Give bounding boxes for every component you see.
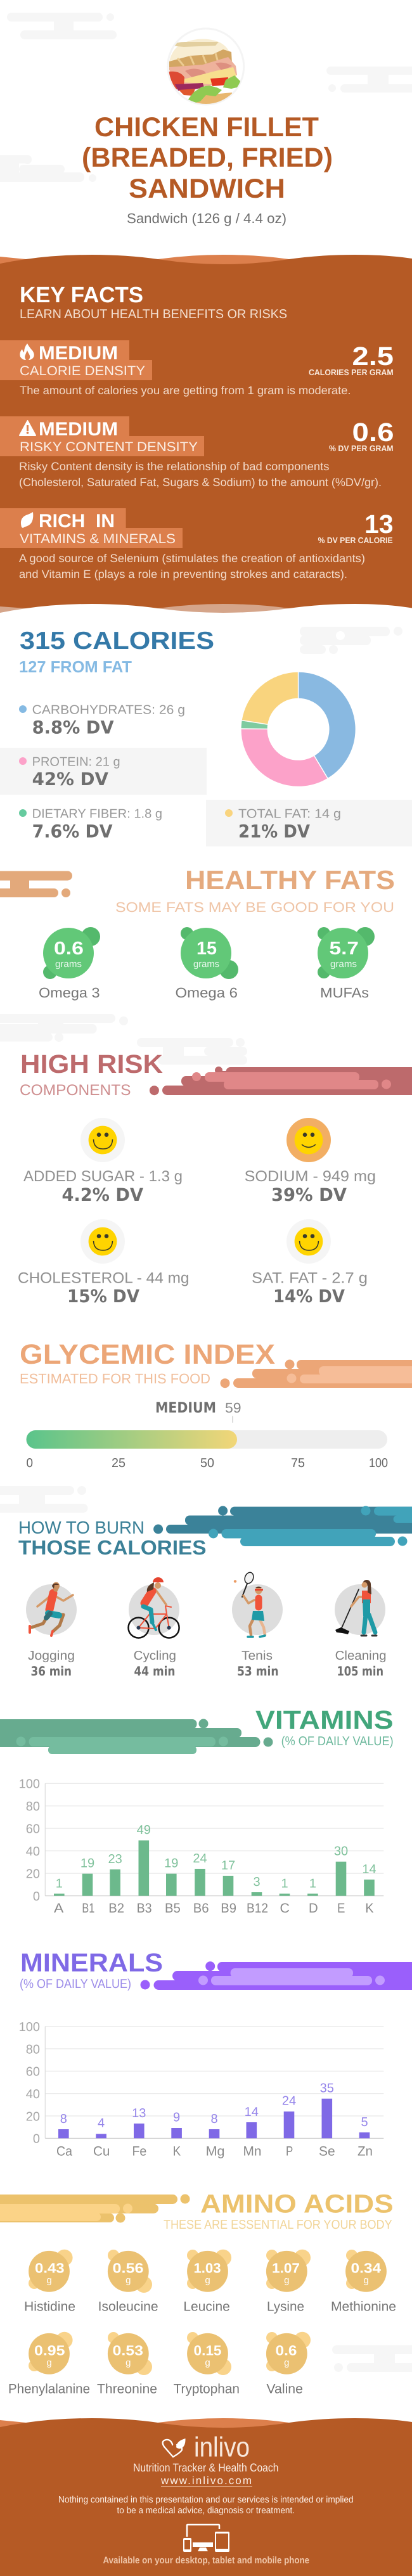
amino acid: tryptophan: g bbox=[205, 2357, 210, 2368]
activity: cycling: 44 min bbox=[134, 1663, 175, 1679]
amino acid: phenylalanine bbox=[8, 2332, 90, 2397]
logo: inlivo: inlivo bbox=[194, 2432, 250, 2463]
icon: cyclist bbox=[128, 1589, 179, 1638]
fact: calorie density: CALORIES PER GRAM bbox=[309, 368, 394, 377]
risk item: cholesterol: CHOLESTEROL - 44 mg bbox=[18, 1270, 189, 1286]
amino acid: methionine: Methionine bbox=[331, 2300, 396, 2314]
subtitle: serving size: Sandwich (126 g / 4.4 oz) bbox=[127, 210, 286, 226]
activity: tennis: 53 min bbox=[237, 1663, 279, 1679]
bar chart: vitamins: 14 bbox=[362, 1862, 377, 1876]
bar chart: vitamins: 20 bbox=[26, 1867, 40, 1881]
bar chart: vitamins: B6 bbox=[193, 1901, 209, 1916]
fact: rich in vitamins and minerals: RICH IN bbox=[39, 511, 115, 532]
amino acid: threonine: 0.53 bbox=[113, 2343, 143, 2359]
heading: key facts: KEY FACTS bbox=[20, 283, 143, 307]
amino acid: leucine: Leucine bbox=[183, 2300, 230, 2314]
glycemic index gauge bbox=[27, 1400, 388, 1470]
amino acid: lysine bbox=[266, 2250, 311, 2314]
amino acid: histidine: g bbox=[46, 2275, 52, 2286]
header photo: sandwich in circle bbox=[168, 29, 244, 109]
bar chart: vitamins: 3 bbox=[253, 1875, 261, 1889]
amino acid: histidine bbox=[24, 2250, 75, 2314]
fact: risky content density bbox=[0, 416, 394, 489]
amino acid: phenylalanine: 0.95 bbox=[34, 2343, 65, 2359]
bar chart: vitamins: 1 bbox=[281, 1876, 288, 1890]
fact: rich in vitamins and minerals: % DV PER CALORIE bbox=[318, 535, 393, 545]
legend: dietary fiber: 7.6% DV bbox=[32, 821, 113, 842]
bar chart: minerals: Se bbox=[319, 2144, 335, 2159]
bar chart: minerals: 14 bbox=[245, 2105, 259, 2119]
legend: protein: PROTEIN: 21 g bbox=[32, 755, 120, 769]
amino acid: histidine: Histidine bbox=[24, 2300, 75, 2314]
logo: inlivo bbox=[163, 2432, 250, 2463]
amino acid: methionine: g bbox=[363, 2275, 369, 2286]
subheading: ESTIMATED FOR THIS FOOD bbox=[20, 1371, 210, 1387]
bar chart: vitamins: D bbox=[309, 1901, 318, 1916]
fact: risky content density: (Cholesterol, Saturated Fat, Sugars & Sodium) to the amount (%DV/gr). bbox=[19, 476, 382, 489]
glycemic index gauge: 100 bbox=[369, 1456, 388, 1470]
heading: amino acids: AMINO ACIDS bbox=[200, 2189, 394, 2219]
legend: total fat: 21% DV bbox=[238, 821, 310, 842]
heading: how to burn those calories: THOSE CALORIES bbox=[18, 1536, 207, 1559]
fact: calorie density: 2.5 bbox=[352, 342, 394, 371]
title bbox=[82, 112, 333, 204]
heading: vitamins bbox=[255, 1705, 394, 1748]
badge: omega 3: Omega 3 bbox=[39, 985, 100, 1001]
bar chart: vitamins: 80 bbox=[26, 1800, 40, 1814]
heading: amino acids bbox=[164, 2189, 394, 2232]
fact: rich in vitamins and minerals: 13 bbox=[364, 509, 394, 539]
bar chart: minerals: 4 bbox=[98, 2117, 105, 2131]
donut chart: macronutrients bbox=[254, 685, 342, 773]
decorative bars: high risk bbox=[150, 1067, 412, 1095]
bar chart: minerals: 24 bbox=[282, 2094, 296, 2108]
title: (BREADED, FRIED) bbox=[82, 143, 333, 173]
activity: cycling bbox=[128, 1577, 179, 1679]
heading: healthy fats: HEALTHY FATS bbox=[185, 865, 395, 895]
bar chart: vitamins: B1 bbox=[82, 1901, 94, 1916]
panel: footer bbox=[0, 2418, 412, 2576]
amino acid: methionine bbox=[331, 2250, 396, 2314]
subheading: THESE ARE ESSENTIAL FOR YOUR BODY bbox=[164, 2218, 392, 2232]
activity: tennis bbox=[232, 1571, 283, 1679]
bar chart: minerals: 60 bbox=[26, 2065, 40, 2079]
subheading: calories from fat: 127 FROM FAT bbox=[19, 657, 132, 676]
icon: desktop, tablet and phone bbox=[183, 2525, 229, 2552]
badge: omega 6: grams bbox=[193, 959, 219, 970]
decorative bars: burn calories bbox=[153, 1506, 412, 1546]
bar chart: vitamins: B2 bbox=[108, 1901, 124, 1916]
activity: jogging: Jogging bbox=[28, 1649, 75, 1663]
decorative bars: vitamins bbox=[0, 1719, 273, 1754]
legend: dietary fiber bbox=[19, 807, 162, 842]
risk item: added sugar: 4.2% DV bbox=[62, 1184, 143, 1205]
fact: risky content density: % DV PER GRAM bbox=[329, 444, 394, 453]
amino acid: methionine: 0.34 bbox=[351, 2260, 382, 2276]
bar chart: minerals: 35 bbox=[320, 2081, 334, 2095]
icon: runner bbox=[30, 1593, 73, 1636]
bar chart: vitamins: 0 bbox=[33, 1890, 40, 1904]
risk item: sodium: 39% DV bbox=[271, 1184, 347, 1205]
title: SANDWICH bbox=[129, 174, 285, 204]
amino acid: tryptophan: 0.15 bbox=[194, 2343, 222, 2359]
bar chart: vitamins: E bbox=[337, 1901, 345, 1916]
activity: cycling: Cycling bbox=[134, 1649, 176, 1663]
badge: omega 3 bbox=[39, 927, 100, 1001]
panel: key facts bbox=[0, 255, 412, 618]
heading: calories bbox=[19, 627, 214, 676]
fact: risky content density: RISKY CONTENT DENSITY bbox=[20, 440, 198, 454]
bar chart: vitamins: 1 bbox=[309, 1876, 316, 1890]
heading: healthy fats bbox=[115, 865, 395, 915]
bar chart: minerals: P bbox=[286, 2144, 293, 2159]
bar chart: minerals: 0 bbox=[33, 2132, 40, 2146]
bar chart: minerals: K bbox=[173, 2144, 181, 2159]
legend: carbohydrates bbox=[19, 703, 185, 738]
bar chart: vitamins: 1 bbox=[56, 1876, 63, 1890]
amino acid: threonine bbox=[97, 2332, 157, 2397]
fact: risky content density: Risky Content density is the relationship of bad components bbox=[19, 460, 330, 473]
glycemic index gauge: MEDIUM bbox=[155, 1400, 216, 1416]
fact: risky content density: 0.6 bbox=[352, 418, 394, 447]
bar chart: minerals: 20 bbox=[26, 2110, 40, 2124]
risk item: saturated fat bbox=[252, 1219, 368, 1307]
subheading: (% OF DAILY VALUE) bbox=[281, 1734, 394, 1748]
bar chart: minerals: 100 bbox=[19, 2020, 40, 2034]
badge: omega 3: grams bbox=[55, 959, 82, 970]
risk item: cholesterol: 15% DV bbox=[67, 1286, 139, 1307]
heading: vitamins: VITAMINS bbox=[255, 1705, 394, 1734]
bar chart: vitamins: B3 bbox=[137, 1901, 152, 1916]
activity: tennis: Tenis bbox=[241, 1649, 273, 1663]
website link: www.inlivo.com bbox=[160, 2475, 252, 2487]
risk item: added sugar: ADDED SUGAR - 1.3 g bbox=[23, 1168, 183, 1185]
decorative bars: glycemic index bbox=[221, 1360, 412, 1388]
amino acid: leucine: 1.03 bbox=[194, 2260, 221, 2276]
bar chart: minerals: Mg bbox=[206, 2144, 224, 2159]
bar chart: minerals: 9 bbox=[173, 2111, 180, 2125]
bar chart: minerals: 8 bbox=[210, 2112, 218, 2126]
amino acid: isoleucine: 0.56 bbox=[113, 2260, 143, 2276]
bar chart: vitamins bbox=[19, 1777, 383, 1916]
amino acid: isoleucine: g bbox=[126, 2275, 131, 2286]
fact: rich in vitamins and minerals bbox=[0, 508, 394, 580]
activity: jogging: 36 min bbox=[30, 1663, 72, 1679]
bar chart: minerals: 8 bbox=[60, 2112, 67, 2126]
fact: calorie density bbox=[0, 340, 394, 397]
amino acid: isoleucine bbox=[98, 2250, 158, 2314]
subheading: SOME FATS MAY BE GOOD FOR YOU bbox=[115, 899, 394, 915]
badge: omega 6: 15 bbox=[196, 939, 217, 959]
subheading: COMPONENTS bbox=[20, 1082, 131, 1099]
bar chart: minerals: 40 bbox=[26, 2087, 40, 2101]
bar chart: minerals: Cu bbox=[93, 2144, 110, 2159]
risk item: sodium: SODIUM - 949 mg bbox=[245, 1168, 376, 1185]
amino acid: histidine: 0.43 bbox=[35, 2260, 65, 2276]
amino acid: leucine: g bbox=[205, 2275, 210, 2286]
legend: total fat bbox=[206, 800, 412, 847]
subheading: (% OF DAILY VALUE) bbox=[20, 1977, 131, 1991]
legend: total fat: TOTAL FAT: 14 g bbox=[238, 807, 341, 821]
bar chart: vitamins: 40 bbox=[26, 1845, 40, 1859]
activity: cleaning: Cleaning bbox=[335, 1649, 387, 1663]
decorative bars: minerals bbox=[141, 1961, 412, 1990]
heading: minerals bbox=[20, 1948, 163, 1991]
badge: MUFAs bbox=[318, 927, 375, 1001]
amino acid: isoleucine: Isoleucine bbox=[98, 2300, 158, 2314]
bar chart: vitamins: 19 bbox=[80, 1857, 94, 1871]
amino acid: leucine bbox=[183, 2250, 231, 2314]
amino acid: tryptophan bbox=[174, 2332, 240, 2397]
risk item: saturated fat: SAT. FAT - 2.7 g bbox=[252, 1270, 368, 1286]
fact: calorie density: MEDIUM bbox=[39, 343, 118, 364]
icon: tennis player bbox=[242, 1571, 265, 1637]
bar chart: vitamins: B5 bbox=[165, 1901, 181, 1916]
amino acid: valine: 0.6 bbox=[275, 2343, 297, 2359]
bar chart: vitamins: 24 bbox=[193, 1852, 207, 1866]
bar chart: minerals: Zn bbox=[357, 2144, 373, 2159]
amino acid: lysine: 1.07 bbox=[272, 2260, 300, 2276]
glycemic index gauge: 50 bbox=[200, 1456, 214, 1470]
badge: MUFAs: MUFAs bbox=[320, 985, 369, 1001]
decorative bars: healthy fats bbox=[0, 871, 72, 897]
bar chart: vitamins: K bbox=[365, 1901, 374, 1916]
activity: cleaning: 105 min bbox=[337, 1663, 383, 1679]
badge: omega 6: Omega 6 bbox=[175, 985, 238, 1001]
risk item: cholesterol bbox=[18, 1219, 189, 1307]
activity: jogging bbox=[26, 1582, 77, 1679]
badge: MUFAs: grams bbox=[330, 959, 357, 970]
glycemic index gauge: 0 bbox=[27, 1456, 33, 1470]
availability note: Available on your desktop, tablet and mobile phone bbox=[103, 2555, 309, 2566]
amino acid: valine: Valine bbox=[266, 2382, 303, 2397]
tagline: Nutrition Tracker & Health Coach bbox=[133, 2461, 279, 2474]
risk item: saturated fat: 14% DV bbox=[273, 1286, 345, 1307]
heading: calories: 315 CALORIES bbox=[20, 627, 214, 655]
legend: carbohydrates: 8.8% DV bbox=[32, 717, 114, 738]
fact: rich in vitamins and minerals: A good source of Selenium (stimulates the creation of antioxidants) bbox=[19, 552, 365, 565]
fact: calorie density: The amount of calories you are getting from 1 gram is moderate. bbox=[20, 384, 351, 397]
heading: glycemic index bbox=[20, 1339, 275, 1387]
legend: protein bbox=[0, 748, 207, 795]
bar chart: vitamins: C bbox=[280, 1901, 290, 1916]
heading: how to burn those calories bbox=[18, 1518, 207, 1559]
legend: carbohydrates: CARBOHYDRATES: 26 g bbox=[32, 703, 185, 717]
legend: dietary fiber: DIETARY FIBER: 1.8 g bbox=[32, 807, 162, 821]
glycemic index gauge: 59 bbox=[225, 1400, 241, 1416]
icon: person sweeping bbox=[342, 1589, 377, 1636]
fact: rich in vitamins and minerals: and Vitamin E (plays a role in preventing strokes and cataracts). bbox=[19, 568, 347, 580]
subheading: LEARN ABOUT HEALTH BENEFITS OR RISKS bbox=[20, 307, 287, 321]
disclaimer: to be a medical advice, diagnosis or treatment. bbox=[117, 2506, 295, 2516]
bar chart: minerals: Mn bbox=[243, 2144, 261, 2159]
risk item: sodium bbox=[245, 1118, 376, 1205]
bar chart: vitamins: 17 bbox=[221, 1859, 235, 1873]
heading: glycemic index: GLYCEMIC INDEX bbox=[20, 1339, 275, 1370]
icon: fire bbox=[20, 343, 34, 360]
fact: calorie density: CALORIE DENSITY bbox=[20, 364, 145, 378]
bar chart: vitamins: 30 bbox=[334, 1844, 348, 1858]
bar chart: minerals: 80 bbox=[26, 2042, 40, 2056]
risk item: added sugar bbox=[23, 1118, 183, 1205]
badge: omega 6 bbox=[175, 927, 238, 1001]
bar chart: minerals bbox=[19, 2020, 383, 2159]
bar chart: vitamins: 49 bbox=[137, 1823, 151, 1837]
bar chart: minerals: 13 bbox=[132, 2106, 146, 2120]
badge: MUFAs: 5.7 bbox=[330, 939, 359, 959]
disclaimer: Nothing contained in this presentation and our services is intended or implied bbox=[58, 2495, 354, 2505]
heading: how to burn those calories: HOW TO BURN bbox=[18, 1518, 145, 1537]
icon: leaf bbox=[21, 512, 33, 528]
amino acid: phenylalanine: Phenylalanine bbox=[8, 2382, 90, 2397]
bar chart: minerals: Ca bbox=[56, 2144, 72, 2159]
icon: warning triangle bbox=[20, 421, 35, 435]
glycemic index gauge: 25 bbox=[112, 1456, 126, 1470]
bar chart: vitamins: A bbox=[54, 1901, 63, 1916]
title: CHICKEN FILLET bbox=[94, 112, 319, 143]
amino acid: threonine: Threonine bbox=[97, 2382, 157, 2397]
activity: cleaning bbox=[335, 1580, 387, 1679]
bar chart: vitamins: 23 bbox=[108, 1852, 122, 1866]
amino acid: threonine: g bbox=[126, 2357, 131, 2368]
bar chart: vitamins: B12 bbox=[247, 1901, 268, 1916]
heading: high risk: HIGH RISK bbox=[20, 1049, 163, 1079]
amino acid: valine: g bbox=[284, 2357, 289, 2368]
glycemic index gauge: 75 bbox=[291, 1456, 305, 1470]
amino acid: valine bbox=[266, 2332, 311, 2397]
bar chart: minerals: 5 bbox=[361, 2115, 368, 2129]
heading: high risk bbox=[20, 1049, 163, 1099]
fact: rich in vitamins and minerals: VITAMINS & MINERALS bbox=[20, 532, 176, 546]
heading: minerals: MINERALS bbox=[20, 1948, 163, 1977]
decorative bars: amino acids bbox=[0, 2194, 190, 2223]
amino acid: phenylalanine: g bbox=[46, 2357, 52, 2368]
disclaimer bbox=[58, 2495, 354, 2516]
amino acid: lysine: g bbox=[284, 2275, 289, 2286]
bar chart: vitamins: 19 bbox=[164, 1857, 178, 1871]
fact: risky content density: MEDIUM bbox=[39, 419, 118, 440]
amino acid: lysine: Lysine bbox=[267, 2300, 304, 2314]
badge: omega 3: 0.6 bbox=[54, 939, 84, 959]
amino acid: tryptophan: Tryptophan bbox=[174, 2382, 240, 2397]
bar chart: minerals: Fe bbox=[132, 2144, 146, 2159]
bar chart: vitamins: 100 bbox=[19, 1777, 40, 1791]
bar chart: vitamins: B9 bbox=[221, 1901, 236, 1916]
bar chart: vitamins: 60 bbox=[26, 1823, 40, 1836]
legend: protein: 42% DV bbox=[32, 769, 108, 790]
